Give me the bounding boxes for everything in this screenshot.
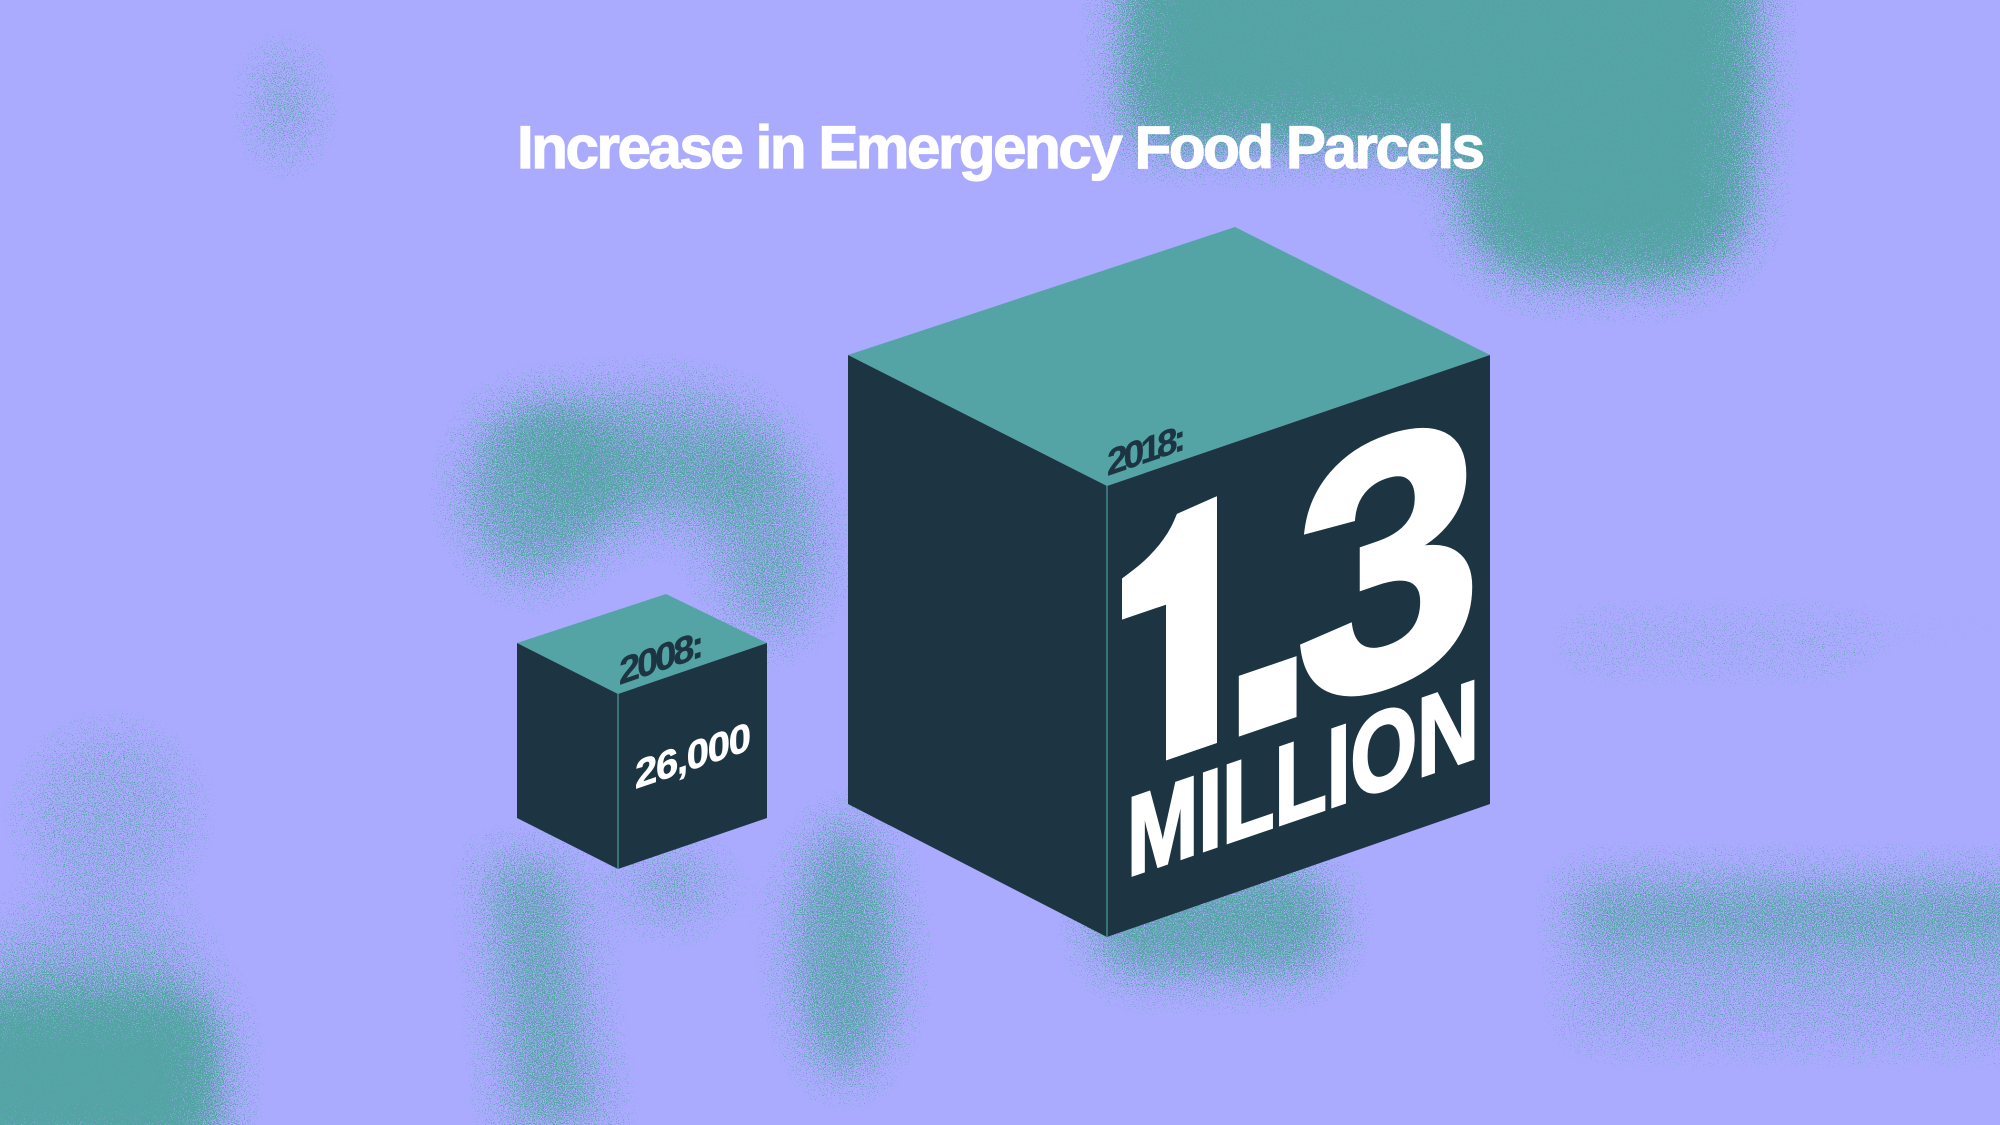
- large cube top face: [848, 227, 1490, 486]
- large cube left face: [848, 355, 1107, 937]
- value: 1.3: [1122, 428, 1472, 760]
- cube: 2008: [517, 594, 767, 869]
- value: 1.3: .: [1213, 350, 1323, 829]
- value: 1.3: 1: [1076, 320, 1286, 891]
- small cube left face: [517, 643, 618, 869]
- value: 1.3: 3: [1295, 332, 1482, 789]
- large cube right face: [1107, 355, 1490, 937]
- value: 26,000: 26,000: [635, 713, 751, 798]
- label: 2018: 2018:: [1107, 417, 1186, 485]
- value: MILLION: MILLION: [1127, 657, 1479, 901]
- small cube top face: [517, 594, 767, 694]
- label: 2008: 2008:: [619, 623, 704, 694]
- title: Increase in Emergency Food Parcels: [517, 114, 1485, 181]
- cube: 2018: [848, 227, 1490, 937]
- small cube right face: [618, 643, 767, 869]
